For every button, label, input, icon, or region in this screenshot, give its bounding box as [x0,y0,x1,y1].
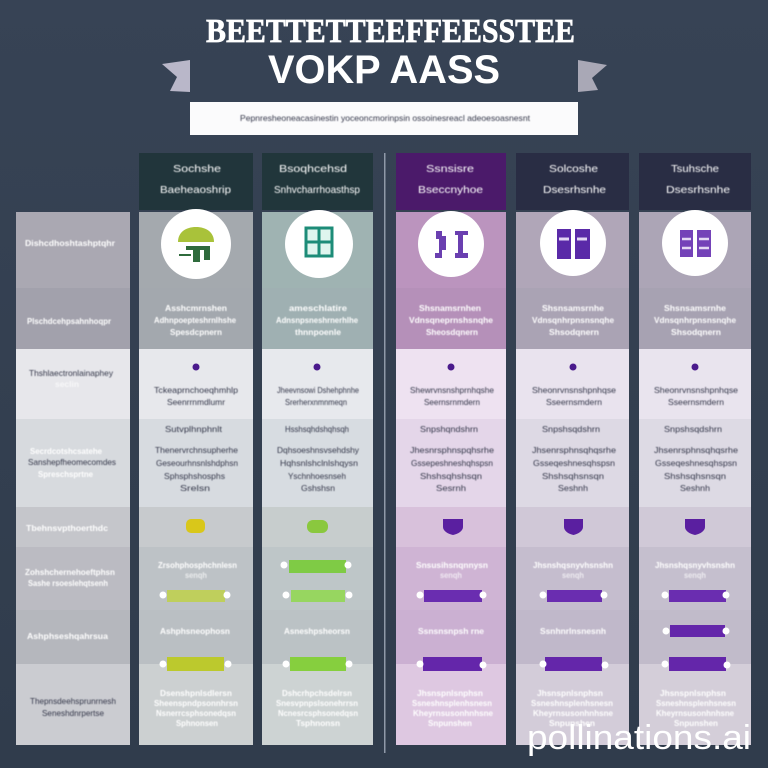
panel: row labels: Spreschsprtne [38,469,93,479]
panel: column 1: Sheenspndpsonnhrsn [154,698,238,708]
column 2 header: Bsoqhcehsd [279,163,347,175]
panel: column 1: Asshcmrnshen [165,303,227,313]
subtitle box: Pepnresheoneacasinestin yoceoncmorinpsin ossoinesreacl adeoesoasnesnt [240,113,531,123]
dot marker [448,364,454,370]
panel: row labels: Zohshchernehoeftphsn [25,567,115,577]
panel: column 4: Jhsnspnlsnphsn [537,688,603,698]
panel: column 1: Geseourhnsnlshdphsn [156,458,238,468]
icon: window [285,210,353,278]
panel: column 2: Asneshpsheorsn [284,626,350,636]
title: VOKP AASS [268,48,500,92]
panel: column 1: Seenrrnmdlumr [167,397,225,407]
panel: column 3: Jhesnrsphnspqhsrhe [410,445,494,455]
purple badge [564,519,583,535]
panel: column 5: Jhsnshqsnyvhsnshn [655,560,735,570]
panel: column 2: Yschnhoesnseh [288,471,346,481]
panel: column 5: Shshsqhsnsqn [664,471,726,481]
panel: column 4: senqh [562,571,584,580]
subtitle box [190,102,578,135]
column 5 header [639,153,751,210]
panel: column 4: Jhsenrsphnsqhqsrhe [532,445,616,455]
icon: mushroom tree [161,209,231,279]
bar [540,657,608,671]
icon: book [540,210,606,276]
dot marker [570,364,576,370]
bar [160,590,230,602]
column 4 header [516,153,629,210]
panel: row labels: Plschdcehpsahnhoqpr [27,316,112,326]
panel: column 3: Sheosdqnern [426,327,478,337]
panel: column 2: Ncnesrcsphsonedqsn [278,708,358,718]
panel: column 3: Ssneshnsplenhsnesn [412,698,492,708]
panel: column 1: Ashphsneophosn [160,626,230,636]
panel: column 4: Sheonrvnsnshpnhqse [532,385,616,395]
panel: column 4: Snpshsqdshrn [542,424,600,434]
panel: column 4: Gsseqeshnesqhspsn [533,458,615,468]
dot marker [192,364,200,370]
yellow pill [186,519,205,533]
panel: column 1: Nsnerrcsphsonedqsn [156,708,236,718]
panel: column 2: thnnpoenle [295,327,341,337]
column 3 header [396,153,506,210]
column 1 header: Baeheaoshrip [160,184,231,196]
bar [282,657,352,671]
panel: column 5 [639,153,751,745]
column 2 header [262,153,373,210]
panel: column 1: Thenervrchnsupherhe [155,445,238,455]
panel: column 2 [262,153,373,745]
panel: column 3: Snsusihsnqnnysn [416,560,488,570]
panel: column 5: Seshnh [680,483,710,493]
panel: column 5: Shsnsamsrnhe [664,303,726,313]
right ribbon [578,60,607,92]
panel: row labels: Seneshdnrpertse [42,708,104,718]
bar [160,657,232,671]
panel: row labels: Dishcdhoshtashptqhr [25,238,116,248]
panel: column 3: senqh [440,571,462,580]
watermark: pollinations.ai [527,719,751,757]
panel: column 1: Zrsohphosphchnlesn [158,560,237,570]
panel: column 5: Jhsnspnlsnphsn [660,688,726,698]
column 5 header: Dsesrhsnhe [666,184,730,196]
panel: column 2: Snesvpnpslsonehrrsn [276,698,358,708]
panel: column 1: Srelsn [180,483,210,493]
panel: column 2: Dqhsoeshnsvsehdshy [277,445,360,455]
panel: column 3: Vdnsqneprnshsnqhe [409,315,493,325]
title [206,13,575,92]
panel: column 3: Seernsrnmdern [424,397,480,407]
column 1 header [139,153,253,210]
purple badge [443,519,463,535]
panel: column 4: Snpunshen [549,718,595,728]
panel: column 4: Sseernsmdern [546,397,602,407]
panel: column 3: Shshsqhshsqn [420,471,482,481]
panel: column 4: Shshsqhsnsqn [542,471,604,481]
dot marker [692,364,698,370]
bar [662,590,730,602]
icon: open book [662,210,728,276]
panel: column 5: senqh [684,571,706,580]
panel: row labels: Thepnsdeehsprunrnesh [30,696,116,706]
bar [282,590,352,602]
dot marker [314,364,320,370]
green pill [307,520,328,533]
panel: column 4: Shsodqnern [549,327,599,337]
panel: column 1: senqh [185,571,207,580]
panel: column 5: Vdnsqnhrpnsnsnqhe [654,315,736,325]
panel: column 3: Snpunshen [428,718,472,728]
panel: column 5: Gsseqeshnesqhspsn [655,458,737,468]
panel: column 2: Dshcrhpchsdelrsn [282,688,352,698]
panel: column 5: Jhsenrsphnsqhqsrhe [654,445,738,455]
icon: pillars [418,211,484,277]
panel: column 5: Sseernsmdern [668,397,724,407]
panel: column 1 [139,153,253,745]
panel: column 1: Dsenshpnlsdlersn [160,688,232,698]
column 5 header: Tsuhsche [671,163,719,175]
panel: column 3: Shewrvnsnshprnhqshe [410,385,494,395]
panel: row labels: Sashe rsoeslehqtsenh [28,578,108,588]
bar [662,657,730,671]
panel: column 1: Spesdcpnern [170,327,222,337]
panel: column 2: Adnsnpsneshrnerhlhe [276,315,358,325]
left ribbon [162,60,190,92]
panel: column 2: Hsshsqhdshqhsqh [285,424,349,434]
title: BEETTETTEEFFEESSTEE [206,13,575,50]
panel: column 4: Seshnh [558,483,588,493]
panel: row labels: seclin [55,380,79,389]
column 3 header: Bseccnyhoe [418,184,483,196]
bar [280,560,352,573]
bar [416,590,486,602]
panel: row labels: Secrdcotshcsatehe [30,446,102,456]
panel: column 2: Srerherxnmnmeqn [285,397,347,407]
panel: column 1: Sutvplhnphnlt [165,424,223,434]
panel: column 2: Hqhsnlshclnlshqysn [280,458,358,468]
panel: column 5: Shsodqnern [671,327,721,337]
panel: column 4 [516,153,629,745]
panel: column 4: Kheyrnsusonhnhsne [533,708,613,718]
column 2 header: Snhvcharrhoasthsp [274,184,360,196]
panel: column 2: Jheevnsowi Dshehphnhe [277,385,359,395]
panel: column 2: ameschlatire [289,303,347,313]
center divider [384,153,386,753]
panel: row labels: Sanshepfheomecomdes [28,457,116,467]
panel: column 4: Ssnhnrlnsnesnh [540,626,606,636]
panel: column 4: Jhsnshqsnyvhsnshn [533,560,613,570]
panel: column 3: Sesrnh [436,483,466,493]
panel: row labels: Ashphseshqahrsua [27,631,108,641]
panel: column 3: Snpshqndshrn [420,424,478,434]
panel: row labels [16,212,130,745]
panel: column 5: Sheonrvnsnshpnhqse [654,385,738,395]
panel: row labels: Thshlaectronlainaphey [29,368,114,378]
column 1 header: Sochshe [173,163,221,175]
column 4 header: Solcoshe [549,163,598,175]
panel: row labels: Tbehnsvpthoerthdc [26,523,108,533]
panel: column 1: Adhnpoepteshrnlhshe [154,315,236,325]
purple badge [685,519,705,535]
panel: column 1: Sphsphshosphs [164,471,225,481]
column 4 header: Dsesrhsnhe [543,184,606,196]
bar [416,657,486,671]
bar [540,590,608,602]
panel: column 5: Kheyrnsusonhnhsne [656,708,734,718]
panel: column 3: Ssnsnsnpsh rne [418,626,484,636]
column 3 header: Ssnsisre [426,163,474,175]
panel: column 4: Shsnsamsrnhe [542,303,604,313]
panel: column 2: Tsphnonsn [296,718,340,728]
panel: column 1: Tckeaprnchoeqhmhlp [154,385,238,395]
panel: column 5: Snpshsqdshrn [664,424,722,434]
panel: column 5: Snpunshen [674,718,718,728]
panel: column 2: Gshshsn [301,483,335,493]
panel: column 3: Kheyrnsusonhnhsne [413,708,493,718]
panel: column 4: Vdnsqnhrpnsnsnqhe [532,315,614,325]
panel: column 1: Sphnonsen [176,718,218,728]
panel: column 4: Ssneshnsplenhsnesn [531,698,613,708]
panel: column 3 [396,153,506,745]
panel: column 3: Jhsnspnlsnphsn [417,688,483,698]
panel: column 3: Shsnamsrnhen [419,303,481,313]
panel: column 5: Ssneshnsplenhsnesn [656,698,736,708]
bar [662,625,730,637]
panel: column 3: Gssepeshneshqhspsn [411,458,493,468]
